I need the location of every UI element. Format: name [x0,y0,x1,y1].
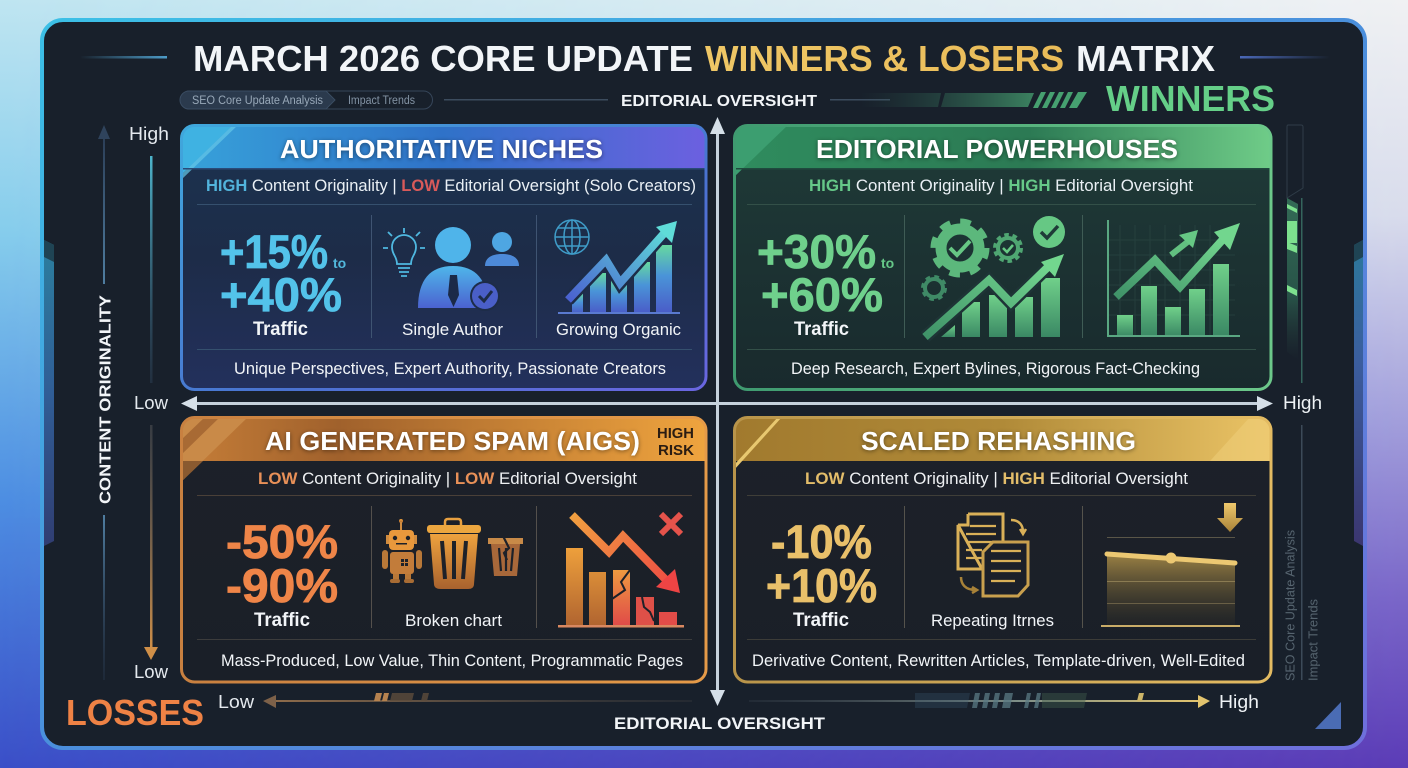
header band: scaled rehashing [734,417,1271,470]
bottom axis scale [218,692,1259,712]
traits line: Unique Perspectives, Expert Authority, Passionate Creators [234,359,666,378]
side rotated tags: Impact Trends [1306,599,1320,681]
header band: editorial powerhouses [734,125,1271,177]
losses label: LOSSES [66,692,204,733]
panel: editorial powerhouses [734,125,1271,390]
bottom axis title: editorial oversight: EDITORIAL OVERSIGHT [614,715,825,733]
tag pills [180,91,432,109]
traffic stat: Traffic [794,319,849,340]
traits line: Mass-Produced, Low Value, Thin Content, Programmatic Pages [221,651,683,670]
top axis title: editorial oversight [444,92,1087,110]
heading: authoritative niches: AUTHORITATIVE NICHES [280,134,603,164]
winners label: WINNERS [1106,78,1275,119]
chart: flat trend line [1101,503,1243,627]
caption: repeating items: Repeating Itrnes [931,611,1054,630]
originality scale: high to low: Low [134,393,169,413]
chart: analytics grid with arrows [1107,220,1240,337]
top axis title: editorial oversight: EDITORIAL OVERSIGHT [621,93,817,110]
traffic stat: -10% [771,515,872,568]
criteria line: LOW Content Originality | LOW Editorial Oversight [258,469,637,488]
icon: single author [418,227,519,311]
bottom axis scale: Low [218,692,255,712]
high risk badge: HIGH [657,426,694,442]
criteria line: LOW Content Originality | HIGH Editorial Oversight [805,469,1188,488]
traffic stat [220,225,346,340]
traffic stat [766,515,877,631]
right side tab [1354,240,1363,546]
vertical axis label: content originality: CONTENT ORIGINALITY [98,295,114,504]
panel: scaled rehashing [734,417,1271,682]
caption: single author: Single Author [402,320,503,339]
originality scale: high to low: Low [134,662,169,682]
high risk badge: RISK [658,443,695,459]
icon: robot [382,519,422,583]
icon: gears and check [923,216,1065,299]
left side tab [44,240,54,546]
traffic stat: +15% [220,225,328,278]
heading: scaled rehashing: SCALED REHASHING [861,426,1136,456]
chart: falling broken bars [558,515,684,628]
header band: authoritative niches [181,125,706,180]
traffic stat: to [333,255,346,271]
traffic stat [226,515,338,631]
originality scale: high to low: High [129,124,169,144]
traits line: Derivative Content, Rewritten Articles, Template-driven, Well-Edited [752,651,1245,670]
right side decoration [1287,125,1303,680]
traffic stat: +40% [220,268,342,321]
originality scale: high to low [129,124,169,682]
chart: growing organic [558,221,680,314]
caption: broken chart: Broken chart [405,611,502,630]
traffic stat: -50% [226,515,338,568]
traffic stat: Traffic [253,319,308,340]
caption: growing organic: Growing Organic [556,320,681,339]
icon: globe [555,220,589,254]
traffic stat: +30% [757,225,876,278]
heading: editorial powerhouses: EDITORIAL POWERHOUSES [816,134,1178,164]
vertical axis label: content originality [98,125,114,680]
title: MARCH 2026 CORE UPDATE [193,38,693,79]
title [80,38,1330,79]
central matrix axes [181,117,1273,706]
corner triangle [1315,702,1341,729]
title: MATRIX [1076,38,1215,79]
panel: ai generated spam [181,417,706,682]
icon: red x mark [661,514,681,534]
traffic stat: -90% [226,559,338,612]
header band: ai generated spam [181,417,706,482]
side rotated tags [1284,530,1320,681]
criteria line: HIGH Content Originality | HIGH Editorial Oversight [809,176,1193,195]
traffic stat: Traffic [793,610,849,631]
traffic stat [757,225,894,340]
traffic stat: +10% [766,559,877,612]
icon: lightbulb [383,228,425,276]
right high label: High [1283,393,1322,413]
traffic stat: Traffic [254,610,310,631]
tag pills: Impact Trends [348,95,415,107]
title: WINNERS & LOSERS [705,38,1064,79]
bottom axis scale: High [1219,692,1259,712]
high risk badge [657,426,695,459]
tag pills: SEO Core Update Analysis [192,95,323,107]
icon: repeating documents [958,514,1028,596]
heading: ai generated spam: AI GENERATED SPAM (AIGS) [265,426,640,456]
traits line: Deep Research, Expert Bylines, Rigorous Fact-Checking [791,359,1200,378]
criteria line: HIGH Content Originality | LOW Editorial Oversight (Solo Creators) [206,176,696,195]
traffic stat: +60% [761,268,883,321]
icon: trash cans [427,519,523,589]
panel: authoritative niches [181,125,706,390]
traffic stat: to [881,255,894,271]
side rotated tags: SEO Core Update Analysis [1284,530,1298,681]
chart: rising bars with arrow [925,254,1064,337]
